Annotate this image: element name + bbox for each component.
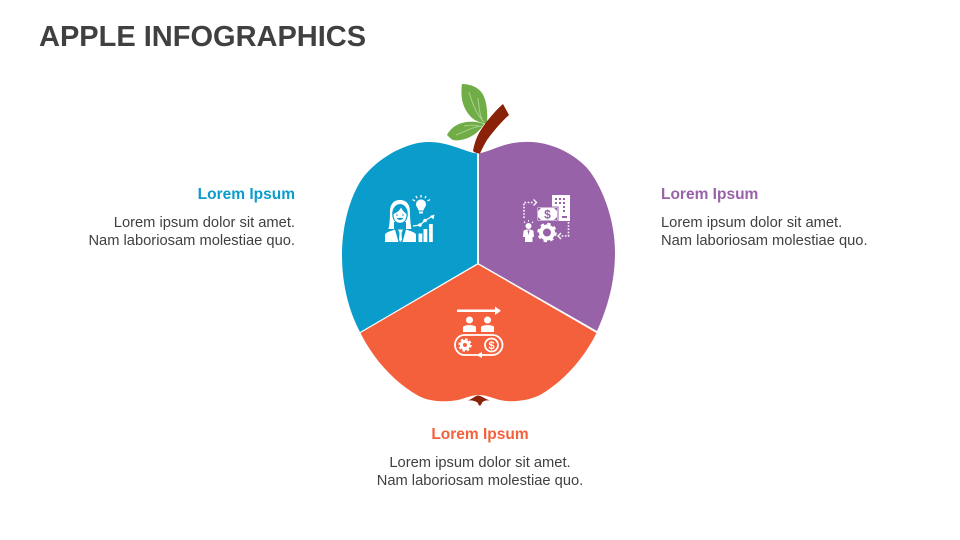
text block: blue left: Lorem ipsum dolor sit amet. <box>114 215 295 231</box>
text block: blue left: Nam laboriosam molestiae quo. <box>88 233 295 249</box>
leaf: lower <box>447 122 484 140</box>
title: APPLE INFOGRAPHICS <box>39 21 366 53</box>
segment: orange bottom <box>360 264 596 401</box>
text block: purple right: Lorem ipsum dolor sit amet. <box>661 215 842 231</box>
apple calyx <box>468 396 490 406</box>
text block: purple right: Lorem Ipsum <box>661 186 758 203</box>
segment: blue left <box>342 142 477 332</box>
text block: orange bottom <box>377 426 583 489</box>
text block: orange bottom: Lorem ipsum dolor sit amet. <box>389 455 571 471</box>
icon: businesswoman with idea and growth chart <box>385 195 434 242</box>
segment: purple right <box>479 142 615 331</box>
text block: orange bottom: Nam laboriosam molestiae quo. <box>377 473 583 489</box>
icon: conveyor with people, gear and coin: $ <box>488 340 495 352</box>
text block: purple right <box>661 186 868 249</box>
icon: conveyor with people, gear and coin <box>455 306 502 358</box>
text block: orange bottom: Lorem Ipsum <box>431 426 529 443</box>
text block: purple right: Nam laboriosam molestiae quo. <box>661 233 868 249</box>
icon: money, building, gear and person <box>523 195 570 242</box>
text block: blue left <box>88 186 295 249</box>
text block: blue left: Lorem Ipsum <box>198 186 295 203</box>
icon: money, building, gear and person: $ <box>544 208 551 222</box>
stem <box>473 104 509 154</box>
leaf: upper <box>461 84 487 124</box>
